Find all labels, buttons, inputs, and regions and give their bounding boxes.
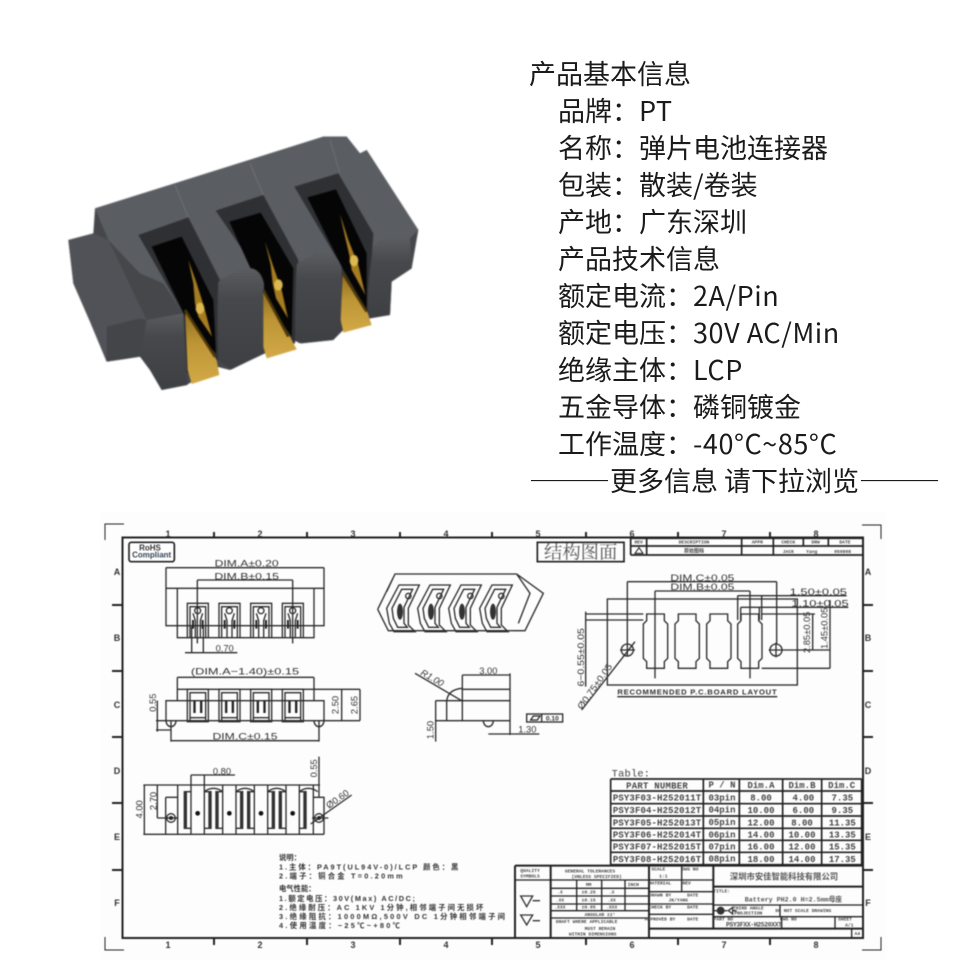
title block: ±0.05 [582,905,596,911]
title block: PSY3FXX-H2520XXT [726,922,782,929]
title block: THIRD ANGLE [733,905,764,911]
bottom view with dimensions: 0.80 [213,766,231,776]
title block: GENERAL TOLERANCES [565,868,615,874]
frame grid labels: 5 [535,529,541,539]
frame grid labels: E [114,832,120,842]
revision table: 原始图档 [684,547,704,554]
bottom view with dimensions: 2.70 [149,792,159,810]
title block: Battery PH2.0 H=2.5mm母座 [745,894,842,903]
frame grid labels: 3 [350,529,356,539]
front view with dimensions: (DIM.A−1.40)±0.15 [191,666,299,676]
frame grid labels: 8 [813,940,819,950]
title block: TITLE: [713,889,730,895]
frame grid labels: 4 [443,529,449,539]
frame grid labels: E [865,832,871,842]
title block: .X [609,890,615,896]
RoHS badge: RoHS [139,544,162,553]
part number table: Dim.A [748,781,775,791]
insulator: 绝缘主体：LCP [558,348,743,388]
part number table: 04pin [709,806,735,816]
frame grid labels: B [114,633,121,643]
part number table: PSY3F08-H252016T [613,855,702,865]
frame grid labels: F [114,898,120,908]
front columns [140,238,412,390]
revision table [631,538,863,555]
part number table: 16.00 [748,843,774,853]
material and electrical notes: 2.端子：铜合金 T=0.20mm [279,872,403,881]
part number table: PSY3F05-H252013T [613,818,702,828]
rated current: 额定电流：2A/Pin [558,274,779,314]
title block: DWG NO [780,917,797,923]
revision table: REV [634,540,643,546]
part number table: 06pin [709,830,735,840]
name: 名称：弹片电池连接器 [558,126,828,166]
front view with dimensions [148,666,360,742]
title block: DRAWN BY [649,893,671,899]
product information text [529,52,940,498]
part number table: 7.35 [832,794,853,804]
part number table: 10.00 [789,831,815,841]
slot recesses [138,173,373,373]
title block: JK/YANG [669,898,688,904]
frame grid labels: C [114,700,121,710]
revision table: DESCRIPTION [679,540,710,546]
RoHS badge [129,542,174,562]
bottom view with dimensions: 4.00 [135,800,145,818]
recommended PCB layout: Ø0.75±0.05 [575,662,614,711]
frame grid labels: 5 [535,940,541,950]
top face [95,137,418,313]
title block: SYMBOLS [520,874,540,880]
title block: REV [682,880,691,886]
top view with dimensions [166,559,324,653]
title block: MM [586,882,592,888]
top view with dimensions: 0.70 [216,643,234,653]
bottom view with dimensions: Ø0.60 [324,788,351,811]
material and electrical notes: 1.额定电压：30V(Max) AC/DC; [279,894,415,903]
recommended PCB layout: 1.50±0.05 [790,587,847,597]
title block: PART NO [714,917,733,923]
title block: SHEET [838,917,852,923]
frame grid labels: B [865,633,872,643]
title block: SCALE [651,867,666,873]
title block [515,866,863,938]
frame grid labels: A [114,567,121,577]
title block: A/1 [845,922,854,928]
part number table: 8.00 [750,794,772,804]
origin: 产地：广东深圳 [558,200,747,240]
drawing frame [105,524,881,950]
material and electrical notes: 2.绝缘耐压：AC 1KV 1分钟,相邻端子间无损坏 [279,903,484,912]
frame grid labels: D [865,766,872,776]
side view with dimensions [415,666,563,742]
side view with dimensions: 3.00 [479,666,497,676]
part number table: Dim.C [828,781,856,791]
part number table: 07pin [709,842,735,852]
part number table: 13.35 [829,831,856,841]
title block: DO NOT SCALE DRAWING [775,908,831,914]
part number table: PSY3F04-H252012T [613,806,702,816]
frame grid labels: 7 [721,529,727,539]
part number table: PART NUMBER [626,781,688,791]
side view with dimensions: 1.30 [518,724,536,734]
material and electrical notes [279,853,505,930]
title block: APPROVED BY [645,916,676,922]
sheet background [100,512,886,960]
title block: PROJECTION [734,911,763,917]
part number table: 15.35 [829,843,856,853]
title block: MUST REMAIN [585,926,616,932]
frame grid labels: D [114,766,121,776]
part number table [611,769,862,865]
slot black openings [152,189,367,353]
recommended PCB layout: 2.85±0.05 [802,612,812,653]
RoHS badge: Compliant [132,551,172,560]
revision table: DRW [811,540,820,546]
title block: CHECK BY [649,905,671,911]
frame grid labels: A [865,567,872,577]
title block: DATE [687,916,698,922]
material and electrical notes: 电气性能： [279,884,316,893]
part number table: 08pin [709,855,735,865]
frame grid labels: F [865,898,871,908]
revision table: APPR [752,540,763,546]
metal body: 五金导体：磷铜镀金 [558,386,801,424]
part number table: 11.35 [829,818,856,828]
title block: .XXX [554,905,566,911]
title block: QUALITY [520,868,540,874]
part number table: 12.00 [789,843,815,853]
frame grid labels: 2 [257,529,263,539]
front view with dimensions: DIM.C±0.15 [212,731,277,741]
revision table: Yang [806,549,817,555]
title block: ±0.15 [582,897,596,903]
title block: A4 [855,931,860,937]
front view with dimensions: 2.50 [331,696,341,714]
side view with dimensions: 1.50 [425,721,435,739]
part number table: 03pin [709,793,735,803]
part number table: PSY3F06-H252014T [613,831,702,841]
title block: .XX [556,897,564,903]
frame grid labels: 6 [629,940,635,950]
part number table: 14.00 [789,855,815,865]
material and electrical notes: 3.绝缘阻抗：1000MΩ,500V DC 1分钟相邻端子间 [279,912,505,921]
frame grid labels: 8 [813,529,819,539]
recommended PCB layout: 1.45±0.05 [820,608,830,649]
title block: DATE [687,893,698,899]
part number table: 05pin [709,818,735,828]
title block: .X [557,890,563,896]
title block: INCH [628,882,639,888]
recommended PCB layout: 6−0.55±0.05 [576,628,586,686]
part number table: PSY3F07-H252015T [613,843,702,853]
structure drawing title box: 结构图面 [544,538,617,564]
part number table: 9.35 [832,806,853,816]
brand: 品牌：PT [558,90,673,128]
revision table: CHECK [781,540,796,546]
front view with dimensions: 0.55 [148,694,158,712]
material and electrical notes: 说明： [279,853,301,862]
scroll hint: ———更多信息 请下拉浏览——— [529,460,940,498]
frame grid labels [114,529,872,950]
recommended PCB layout: RECOMMENDED P.C.BOARD LAYOUT [617,687,777,696]
heading: basic information: 产品基本信息 [529,52,691,92]
gold contact pins [185,214,372,384]
rated voltage: 额定电压：30V AC/Min [558,312,840,350]
side view with dimensions: R1.00 [419,668,446,689]
part number table: 10.00 [748,806,774,816]
title block: DATE [687,905,698,911]
frame grid labels: 6 [629,529,635,539]
title block: (UNLESS SPECIFIED) [572,874,622,880]
recommended PCB layout: DIM.C±0.05 [670,573,734,583]
isometric view [378,574,543,632]
part number table: Dim.B [789,781,816,791]
heading: technical information: 产品技术信息 [558,238,720,276]
title block: 深圳市安佳智能科技有限公司 [730,870,838,882]
connector body base [68,137,418,390]
part number table: 12.00 [748,818,774,828]
title block: WITHIN DIMENSIONS [569,932,617,938]
frame grid labels: 1 [165,529,171,539]
frame grid labels: 7 [721,940,727,950]
side view with dimensions: 0.10 [546,715,559,722]
frame grid labels: 2 [257,940,263,950]
part number table: 14.00 [748,831,774,841]
title block: .XX [607,897,616,903]
title block: DWG NO [682,867,699,873]
front view with dimensions: 2.65 [350,696,360,714]
frame grid labels: C [865,700,872,710]
part number table: 8.00 [791,818,813,828]
recommended PCB layout: 1.10±0.05 [791,599,849,609]
bottom view with dimensions [135,757,352,834]
top view with dimensions: DIM.B±0.15 [214,571,279,581]
title block: MATERIAL [649,880,671,886]
frame grid labels: 4 [443,940,449,950]
part number table: 4.00 [793,794,814,804]
bottom view with dimensions: 0.55 [309,759,319,777]
part number table: P / N [709,781,735,791]
part number table: PSY3F03-H252011T [613,794,702,804]
part number table: 17.35 [829,855,856,865]
revision table: JACK [783,549,794,555]
title block: 1:1 [659,873,668,879]
frame grid labels: 1 [165,940,171,950]
top view with dimensions: DIM.A±0.20 [215,559,279,569]
frame grid labels: 3 [350,940,356,950]
material and electrical notes: 4.使用温度：−25℃~+80℃ [279,921,401,930]
recommended PCB layout [575,573,849,711]
material and electrical notes: 1.主体：PA9T(UL94V-0)/LCP 颜色：黑 [279,862,459,871]
packaging: 包装：散装/卷装 [558,164,758,202]
part number table: 18.00 [748,855,774,865]
part number table: 6.00 [793,806,814,816]
title block: ANGULAR ±1° [585,912,616,918]
revision table: DATE [839,540,851,546]
revision table: 050808 [834,549,851,555]
left flange [68,233,147,362]
title block: DRAFT WHERE APPLICABLE [556,919,618,925]
working temperature: 工作温度：-40°C~85°C [558,422,837,462]
part number table: Table: [612,769,650,781]
body seam lines [175,140,340,217]
recommended PCB layout: DIM.B±0.05 [670,582,734,592]
product photo: battery connector [67,136,420,391]
title block: ±0.25 [582,890,596,896]
title block: .XXX [606,905,617,911]
